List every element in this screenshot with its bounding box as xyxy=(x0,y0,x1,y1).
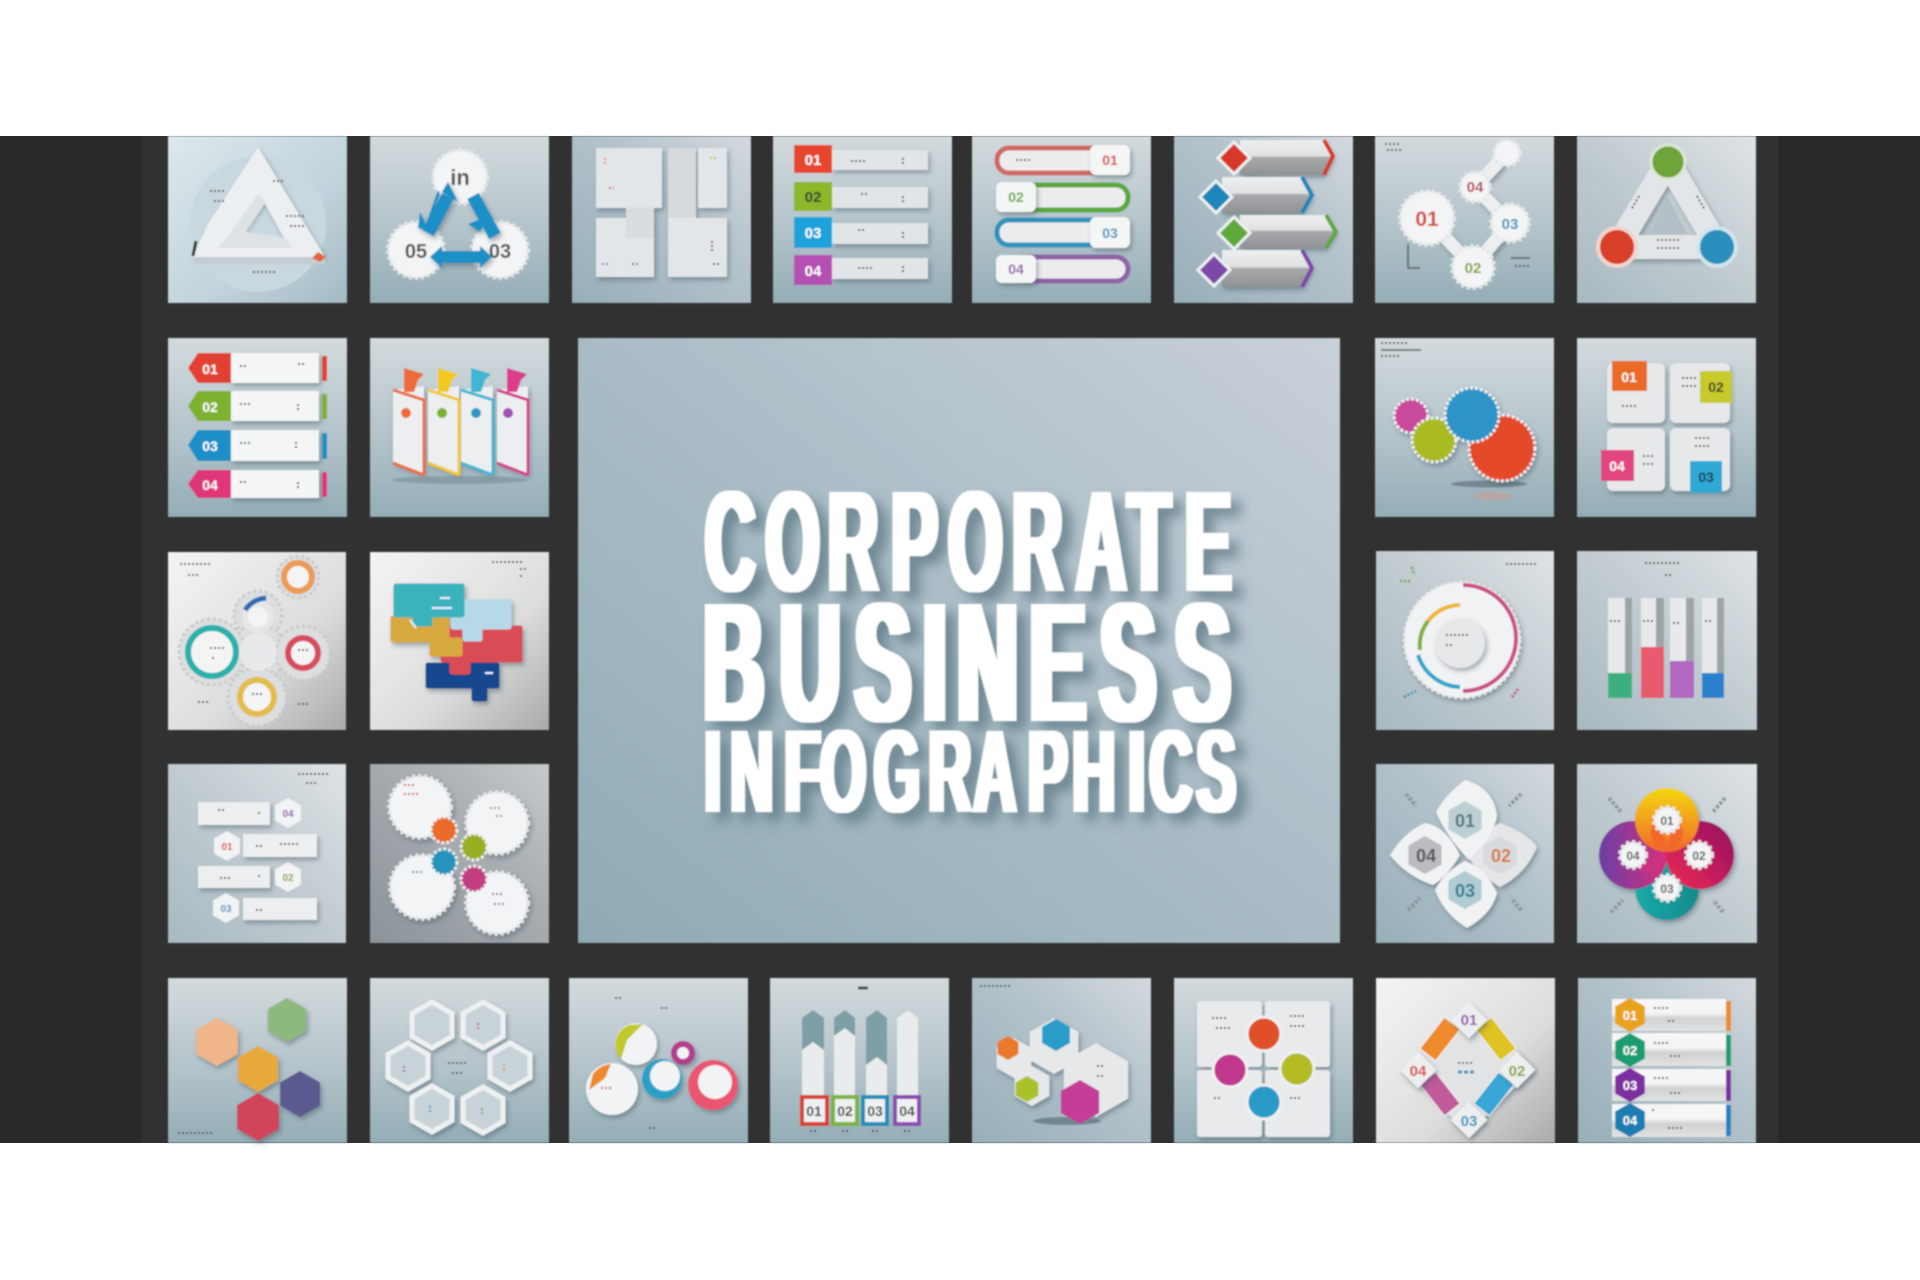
panel: staggered labels: 04 xyxy=(282,809,294,820)
panel: colored spheres xyxy=(1375,338,1554,517)
panel: arrow prisms xyxy=(1174,136,1353,303)
tabs: 04 xyxy=(805,263,822,280)
panel: colored speech blocks xyxy=(370,552,549,730)
panel: three gears with arrows xyxy=(370,136,549,303)
gold block xyxy=(393,618,460,654)
triangle frame xyxy=(193,147,325,257)
panel: four petals: 01 xyxy=(1455,811,1475,831)
panel: staggered labels xyxy=(168,764,346,943)
panel: bar chart columns xyxy=(1577,551,1757,730)
panel: outlined pills: 02 xyxy=(1008,189,1024,205)
levels xyxy=(802,1010,918,1095)
tabs xyxy=(996,145,1130,283)
panel: four petals: 02 xyxy=(1491,846,1511,866)
panel: gear chain: 02 xyxy=(1465,260,1481,277)
panel: diamond process: 03 xyxy=(1461,1113,1477,1130)
colored value squares xyxy=(802,1097,919,1124)
colored bars xyxy=(1420,1017,1516,1116)
bars xyxy=(832,150,928,279)
panel: tube chart: 01 xyxy=(806,1103,822,1119)
panel: colored hexagons xyxy=(168,978,347,1143)
ring arcs xyxy=(1418,585,1516,691)
panel: staggered labels: 02 xyxy=(282,873,294,884)
blue arrows xyxy=(418,182,495,268)
red block xyxy=(443,628,520,672)
panel: four puzzle squares xyxy=(1577,338,1756,517)
panel: overlapping color circles: 01 xyxy=(1660,814,1674,828)
panel: four puzzle squares: 02 xyxy=(1708,379,1724,395)
panel: outlined pills: 04 xyxy=(1008,261,1024,277)
colored gear rings xyxy=(188,563,318,714)
top gear xyxy=(433,150,487,204)
panel: four puzzle squares: 04 xyxy=(1609,458,1625,474)
top gear: in xyxy=(450,165,470,190)
panel: outlined pills: 01 xyxy=(1102,152,1118,168)
panel: impossible triangle xyxy=(168,136,347,303)
panel: paper rectangles xyxy=(572,136,751,303)
tabs: 01 xyxy=(805,152,821,169)
prisms xyxy=(1222,140,1336,287)
panel: labeled ribbons: 02 xyxy=(202,399,218,415)
teal block xyxy=(396,586,462,624)
panel: four petals: 03 xyxy=(1455,881,1475,901)
panel: central title card xyxy=(578,338,1340,943)
panel: diamond process: 01 xyxy=(1461,1012,1477,1029)
panel: partial-ring circles xyxy=(569,978,748,1143)
tile grid xyxy=(168,136,1757,1143)
panel: petal gears xyxy=(370,764,549,943)
panel: staggered labels: 01 xyxy=(221,842,233,853)
tubes xyxy=(802,1010,918,1095)
panel: four-piece puzzle with circles xyxy=(1174,978,1353,1143)
panel: diamond process: 02 xyxy=(1509,1063,1525,1080)
panel: hexagon list: 04 xyxy=(1623,1113,1638,1128)
tabs xyxy=(794,145,832,285)
panel: tube chart: 03 xyxy=(867,1103,883,1119)
panel: overlapping color circles: 02 xyxy=(1692,849,1706,863)
panel: gear chain xyxy=(1375,136,1554,303)
panel: labeled ribbons: 04 xyxy=(202,477,218,493)
red badge xyxy=(1598,228,1636,266)
panel: tube chart: 04 xyxy=(899,1103,915,1119)
large gear 01: 01 xyxy=(1415,208,1439,231)
panel: four flags xyxy=(370,338,549,517)
title line: CORPORATE: CORPORATE xyxy=(705,461,1231,622)
left gear xyxy=(388,222,444,278)
title xyxy=(704,461,1236,837)
panel: four puzzle squares: 03 xyxy=(1698,469,1714,485)
panel: outlined pills: 03 xyxy=(1102,225,1118,241)
panel: labeled ribbons xyxy=(168,338,347,517)
left gear: 05 xyxy=(405,241,427,263)
panel: tube chart xyxy=(770,978,949,1143)
large gear 01 xyxy=(1400,191,1454,245)
panel: hexagon list: 03 xyxy=(1623,1078,1637,1093)
panel: four colored tabs xyxy=(773,136,952,303)
title line: BUSINESS: BUSINESS xyxy=(704,569,1230,758)
panel: diamond process: 04 xyxy=(1410,1063,1427,1080)
panel: labeled ribbons: 01 xyxy=(202,361,218,377)
hexagon badges xyxy=(1615,998,1645,1137)
panel: staggered labels: 03 xyxy=(220,904,232,915)
tabs: 02 xyxy=(805,189,821,206)
navy block xyxy=(428,665,497,699)
panel: outlined pills xyxy=(972,136,1151,303)
right gear xyxy=(472,222,528,278)
flags xyxy=(404,368,527,392)
panel: hexagon list: 02 xyxy=(1623,1043,1637,1058)
panel: tube chart: 02 xyxy=(837,1103,853,1119)
panel: labeled ribbons: 03 xyxy=(202,438,218,454)
panel: four puzzle squares: 01 xyxy=(1621,369,1637,385)
nodes xyxy=(1400,1002,1535,1138)
petal hexagons xyxy=(1408,801,1517,909)
panel: overlapping color circles: 03 xyxy=(1660,882,1674,896)
panel: overlapping color circles xyxy=(1577,764,1757,943)
panel: gear chain: 03 xyxy=(1502,216,1518,233)
title line: INFOGRAPHICS: INFOGRAPHICS xyxy=(704,706,1236,837)
panel: five gears xyxy=(168,552,346,730)
panel: triangle with three badges xyxy=(1577,136,1756,303)
color blobs xyxy=(998,1019,1099,1124)
blue badge xyxy=(1698,228,1736,266)
panel: hexagon list: 01 xyxy=(1623,1008,1637,1023)
panel: gear chain: 04 xyxy=(1467,179,1484,196)
panel: diamond process xyxy=(1376,978,1555,1143)
panel: four petals xyxy=(1376,764,1554,943)
panel: circular ring diagram xyxy=(1376,551,1554,730)
green badge xyxy=(1651,145,1685,179)
tabs: 03 xyxy=(805,225,821,242)
diamonds xyxy=(1198,142,1250,286)
panel: hexagon cluster xyxy=(972,978,1151,1143)
panel: four petals: 04 xyxy=(1416,846,1436,866)
panel: hexagon list xyxy=(1578,978,1756,1143)
panel: overlapping color circles: 04 xyxy=(1626,849,1640,863)
dark background band xyxy=(0,136,1920,1143)
value bars xyxy=(1608,673,1632,698)
columns xyxy=(1608,598,1717,698)
hexagon labels xyxy=(215,800,299,921)
panel: hexagon ring xyxy=(370,978,549,1143)
right gear: 03 xyxy=(489,241,511,263)
light blue block xyxy=(453,602,509,639)
